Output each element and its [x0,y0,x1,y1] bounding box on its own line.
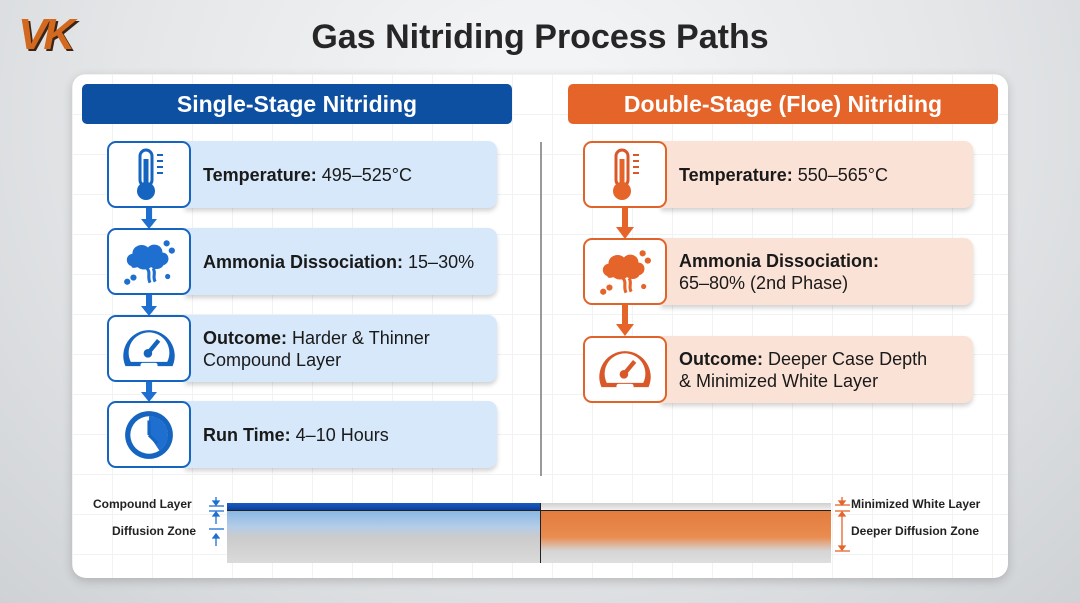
double-stage section [540,503,831,563]
heading: single-stage: Single-Stage Nitriding [177,91,417,117]
right dimension marks [835,497,850,552]
main panel [72,74,1008,578]
step: ammonia double: Ammonia Dissociation: [679,250,879,270]
step: outcome single: Compound Layer [203,350,341,370]
step: run time [107,401,499,473]
step: temperature single [107,141,499,213]
heading: double-stage: Double-Stage (Floe) Nitriding [624,91,942,117]
single-stage section [227,503,540,563]
step: outcome single [107,315,499,387]
step: outcome double [583,336,975,408]
step: temperature single: Temperature: 495–525°C [203,164,412,184]
arrow [616,208,634,238]
step: ammonia double: 65–80% (2nd Phase) [679,272,848,292]
step: outcome single: Outcome: Harder & Thinner [203,328,430,348]
step: temperature double [583,141,975,213]
arrow [141,382,157,401]
left dimension marks [209,497,224,546]
label: diffusion zone: Diffusion Zone [112,524,196,538]
cross-section strip [227,503,831,563]
heading: single-stage [82,84,512,124]
label: minimized white layer: Minimized White Layer [851,497,980,511]
title: Gas Nitriding Process Paths [311,18,769,56]
label: deeper diffusion zone: Deeper Diffusion Zone [851,524,979,538]
arrow [616,305,634,336]
step: outcome double: Outcome: Deeper Case Depth [679,348,927,368]
step: temperature double: Temperature: 550–565°C [679,164,888,184]
arrow [141,295,157,315]
logo: VK [18,10,71,59]
divider [540,142,542,476]
step: run time: Run Time: 4–10 Hours [203,424,389,444]
step: ammonia double [583,238,975,310]
step: ammonia single [107,228,499,300]
step: ammonia single: Ammonia Dissociation: 15–30% [203,252,474,272]
step: outcome double: & Minimized White Layer [679,370,878,390]
arrow [141,208,157,228]
label: compound layer: Compound Layer [93,497,192,511]
heading: double-stage [568,84,998,124]
